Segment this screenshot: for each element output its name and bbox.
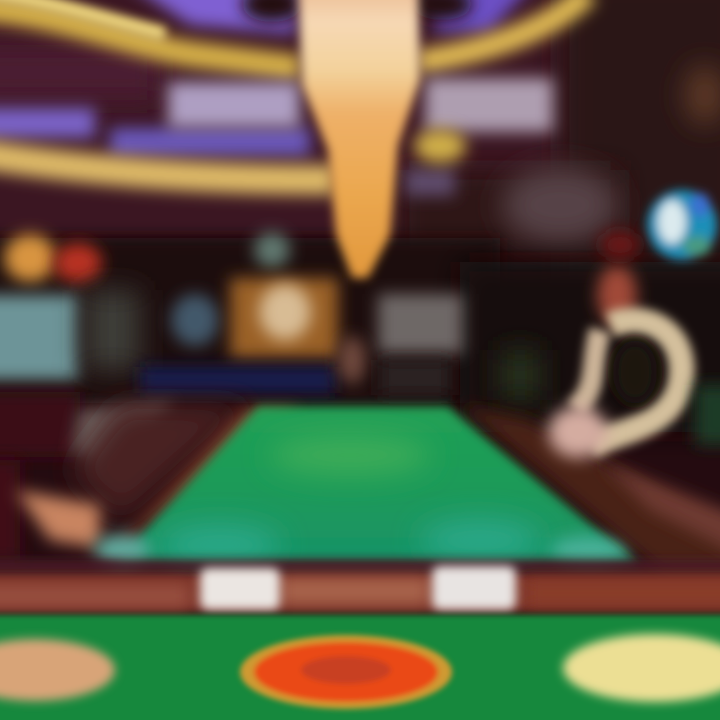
icon: blue and white orb — [647, 190, 717, 260]
yellow ceiling arcs — [0, 8, 300, 68]
white chip stack right — [432, 566, 516, 610]
left betting oval — [0, 639, 115, 701]
bottom green felt — [0, 615, 720, 720]
middle row: slot machines and crowd — [0, 232, 720, 432]
green table — [94, 406, 640, 566]
table rail — [0, 560, 720, 612]
centre betting oval — [240, 635, 452, 709]
left lower seating — [0, 392, 250, 560]
white chip stack left — [200, 568, 280, 610]
ceiling and upper balcony — [0, 0, 720, 290]
lower yellow balcony band — [0, 154, 335, 180]
chandelier — [298, 0, 420, 278]
right betting oval — [563, 634, 720, 702]
lavender bands — [0, 108, 95, 138]
right side table edge and figure — [460, 231, 720, 575]
purple ceiling — [110, 0, 295, 34]
